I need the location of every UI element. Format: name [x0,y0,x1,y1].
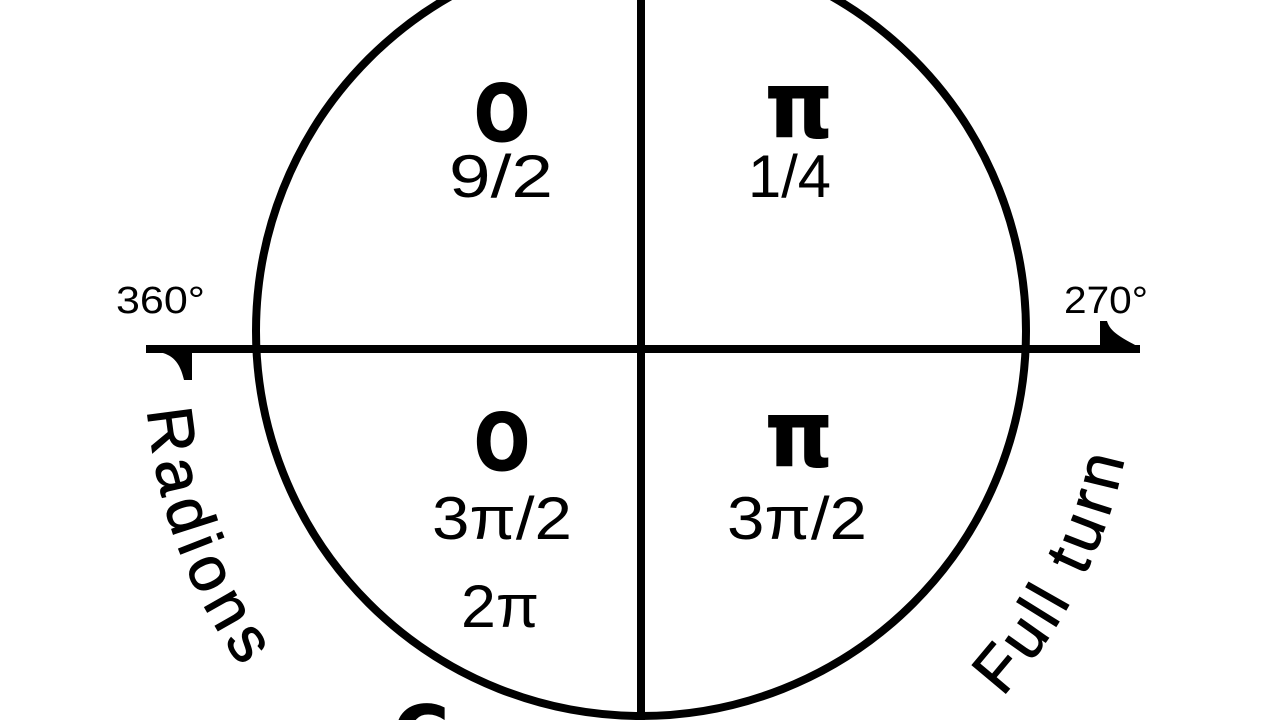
value: 1/4: 1/4 [748,143,831,210]
curved label: Full turn: Full turn [971,456,1124,694]
left arrowhead [158,350,192,380]
symbol: pi: π [765,381,833,488]
curved label: Radions: Radions [147,408,265,662]
quadrant: bottom left [432,399,572,640]
value: 3π/2: 3π/2 [432,485,572,552]
circle [256,0,1026,716]
horizontal axis [146,345,1140,353]
symbol: pi: π [765,52,833,159]
label: 360 degrees: 360° [116,280,205,322]
value: 2π: 2π [461,573,539,640]
symbol: zero: O [474,70,530,160]
symbol: zero: O [474,399,530,489]
value: 9/2: 9/2 [449,143,553,210]
value: 3π/2: 3π/2 [727,485,867,552]
right arrowhead [1100,321,1139,350]
quadrant: top left [449,70,553,210]
quadrant: bottom right [727,381,867,552]
label: 270 degrees: 270° [1064,280,1148,322]
quadrant: top right [748,52,833,210]
vertical axis [637,0,645,720]
